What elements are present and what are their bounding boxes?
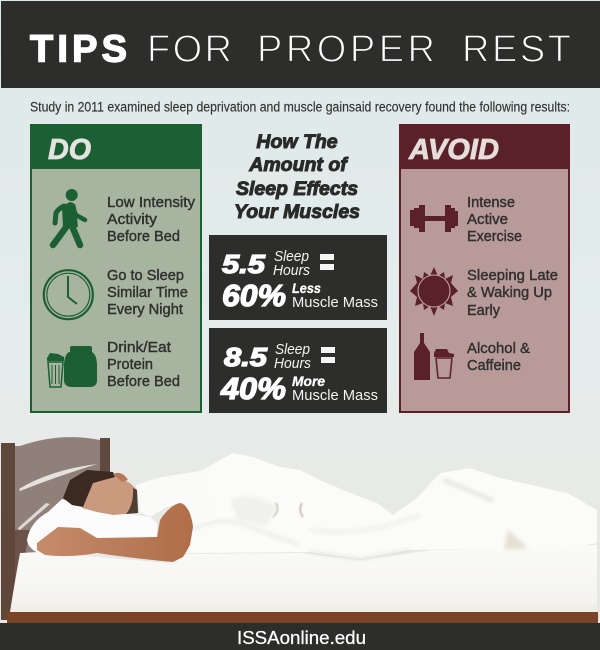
footer url: ISSAonline.edu	[237, 627, 366, 648]
stat box: 5.5 hours: Hours	[273, 262, 310, 279]
text: low intensity	[107, 195, 196, 245]
stat box: 5.5 hours: 5.5	[222, 249, 266, 279]
text: sleeping late: Sleeping Late	[467, 268, 558, 284]
duvet	[187, 453, 597, 559]
center column heading: Amount of	[248, 154, 349, 176]
text: intense exercise: Active	[467, 212, 508, 228]
text: go to sleep: Go to Sleep	[107, 268, 184, 284]
pillow	[27, 499, 157, 553]
text: intense exercise: Intense	[467, 195, 515, 211]
panel: do	[30, 124, 202, 412]
text: drink eat protein: Protein	[107, 357, 153, 373]
arm	[37, 503, 193, 562]
text: alcohol and caffeine: Alcohol &	[467, 341, 530, 357]
header band	[1, 1, 600, 88]
icon: protein shaker and jar	[47, 346, 97, 387]
mattress	[10, 545, 597, 612]
stat box: 8.5 hours: More	[292, 373, 325, 389]
stat box: 5.5 hours: Less	[292, 280, 321, 296]
stat box: 5.5 hours	[209, 235, 387, 320]
stat box: 8.5 hours: 8.5	[224, 342, 268, 372]
title: TIPS	[30, 28, 127, 70]
text: low intensity: Low Intensity	[107, 195, 196, 211]
center column heading: Sleep Effects	[236, 178, 358, 200]
text: drink eat protein	[107, 340, 180, 390]
text: drink eat protein: Drink/Eat	[107, 340, 171, 356]
text: sleeping late: Early	[467, 303, 501, 319]
text: intense exercise	[467, 195, 522, 245]
title: FOR	[147, 28, 232, 70]
center column heading: Your Muscles	[234, 201, 360, 223]
text: go to sleep	[107, 268, 188, 318]
title: PROPER	[257, 28, 435, 70]
heading: do: DO	[48, 134, 91, 166]
stat box: 5.5 hours: Sleep	[274, 248, 309, 265]
title	[30, 28, 571, 70]
head	[63, 470, 138, 515]
heading: avoid: AVOID	[408, 134, 499, 166]
stat box: 5.5 hours: Muscle Mass	[292, 294, 378, 311]
icon: walking person	[53, 189, 85, 245]
text: sleeping late: & Waking Up	[467, 285, 552, 301]
stat box: 8.5 hours: Muscle Mass	[292, 387, 378, 404]
stat box: 8.5 hours: 40%	[220, 371, 286, 406]
footer band	[0, 623, 600, 650]
icon: sun	[410, 267, 458, 316]
text: alcohol and caffeine	[467, 341, 530, 374]
text: low intensity: Activity	[107, 212, 158, 228]
text: drink eat protein: Before Bed	[107, 374, 180, 390]
panel: avoid	[399, 124, 570, 412]
text: go to sleep: Every Night	[107, 302, 183, 318]
icon: dumbbell	[410, 205, 458, 232]
center column heading	[234, 131, 360, 223]
stat box: 8.5 hours: Hours	[274, 355, 311, 372]
text: sleeping late	[467, 268, 558, 319]
icon: bottle and cup	[414, 333, 454, 380]
text: alcohol and caffeine: Caffeine	[467, 358, 521, 374]
text: low intensity: Before Bed	[107, 229, 180, 245]
stat box: 5.5 hours: 60%	[222, 278, 286, 313]
stat box: 8.5 hours: Sleep	[275, 341, 310, 358]
headboard	[1, 437, 110, 620]
icon: clock	[44, 270, 93, 319]
shirt	[136, 470, 215, 525]
text: intense exercise: Exercise	[467, 229, 522, 245]
text: go to sleep: Similar Time	[107, 285, 188, 301]
bed frame	[7, 612, 598, 623]
stat box: 8.5 hours	[209, 328, 387, 413]
illustration: man sleeping in bed	[1, 437, 598, 623]
center column heading: How The	[256, 131, 338, 153]
title: REST	[462, 28, 571, 70]
